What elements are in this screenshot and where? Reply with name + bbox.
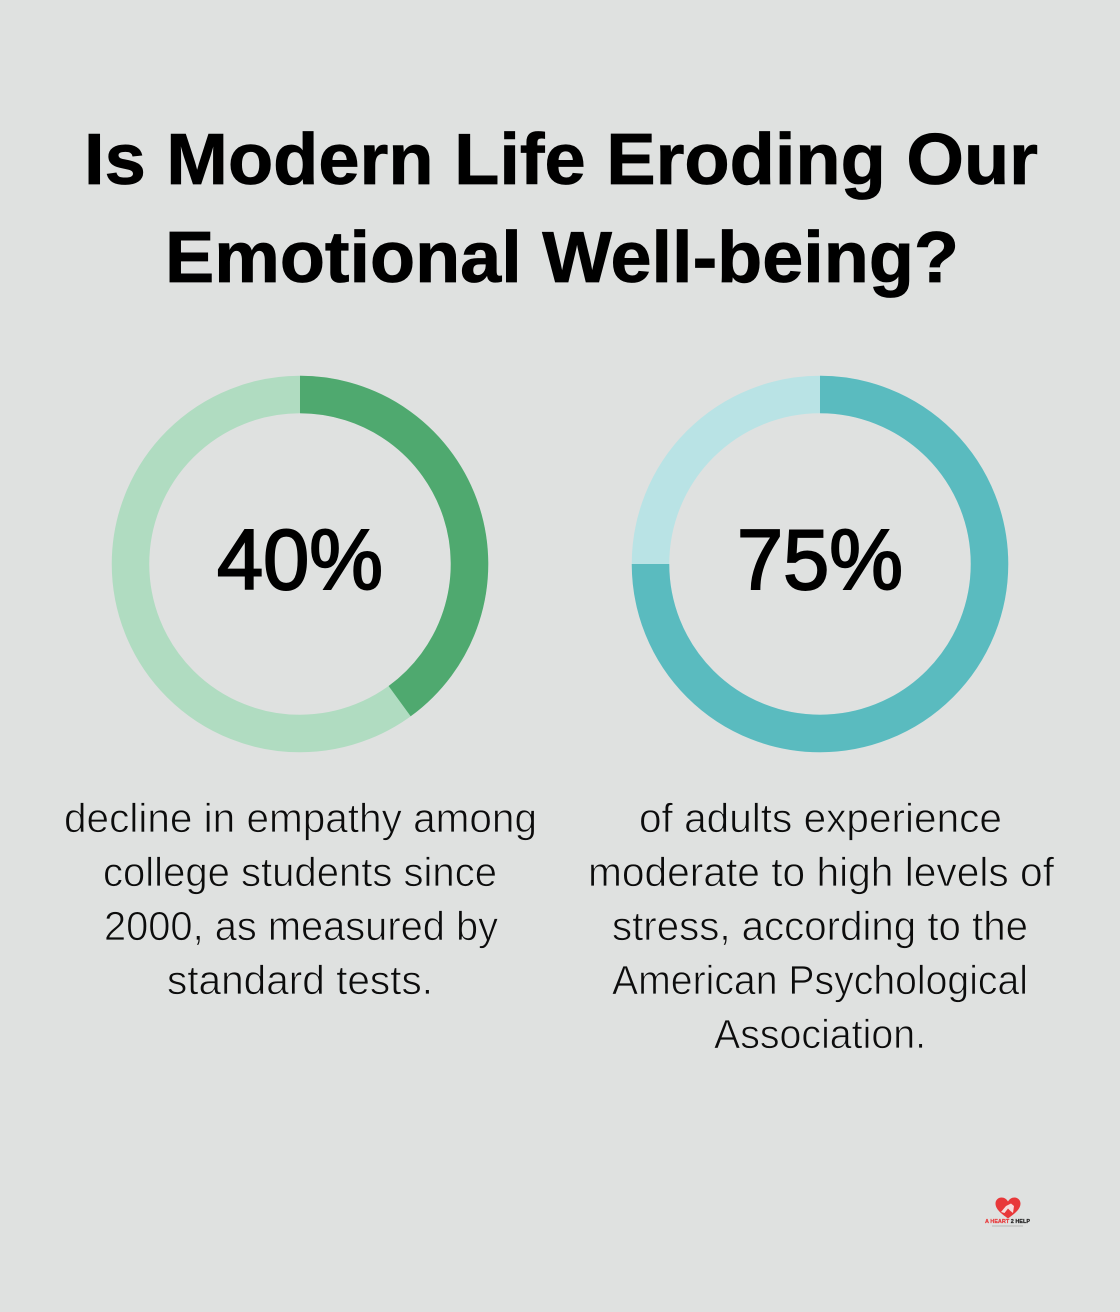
description: empathy decline: decline in empathy among <box>64 795 537 841</box>
donut chart: 40% <box>130 394 470 734</box>
description: empathy decline: college students since <box>103 849 497 895</box>
icon: heart with hands <box>996 1198 1020 1218</box>
logo wordmark: A HEART 2 HELP <box>985 1219 1030 1225</box>
description: empathy decline <box>64 795 537 1003</box>
description: adult stress: Association. <box>714 1011 926 1057</box>
panel: 40% empathy decline <box>64 394 537 1003</box>
donut chart: 75% <box>650 394 990 734</box>
title: Emotional Well-being? <box>165 218 959 298</box>
description: empathy decline: 2000, as measured by <box>104 903 498 949</box>
description: adult stress: moderate to high levels of <box>588 849 1055 895</box>
title: Is Modern Life Eroding Our <box>84 120 1038 200</box>
logo: A Heart 2 Help <box>985 1198 1030 1226</box>
panel: 75% adult stress <box>588 394 1055 1057</box>
description: empathy decline: standard tests. <box>167 957 433 1003</box>
description: adult stress: American Psychological <box>612 957 1028 1003</box>
description: adult stress <box>588 795 1055 1057</box>
stat value: 75%: 75% <box>737 513 903 608</box>
stat value: 40%: 40% <box>217 513 383 608</box>
description: adult stress: stress, according to the <box>612 903 1028 949</box>
title <box>84 120 1038 298</box>
description: adult stress: of adults experience <box>639 795 1002 841</box>
